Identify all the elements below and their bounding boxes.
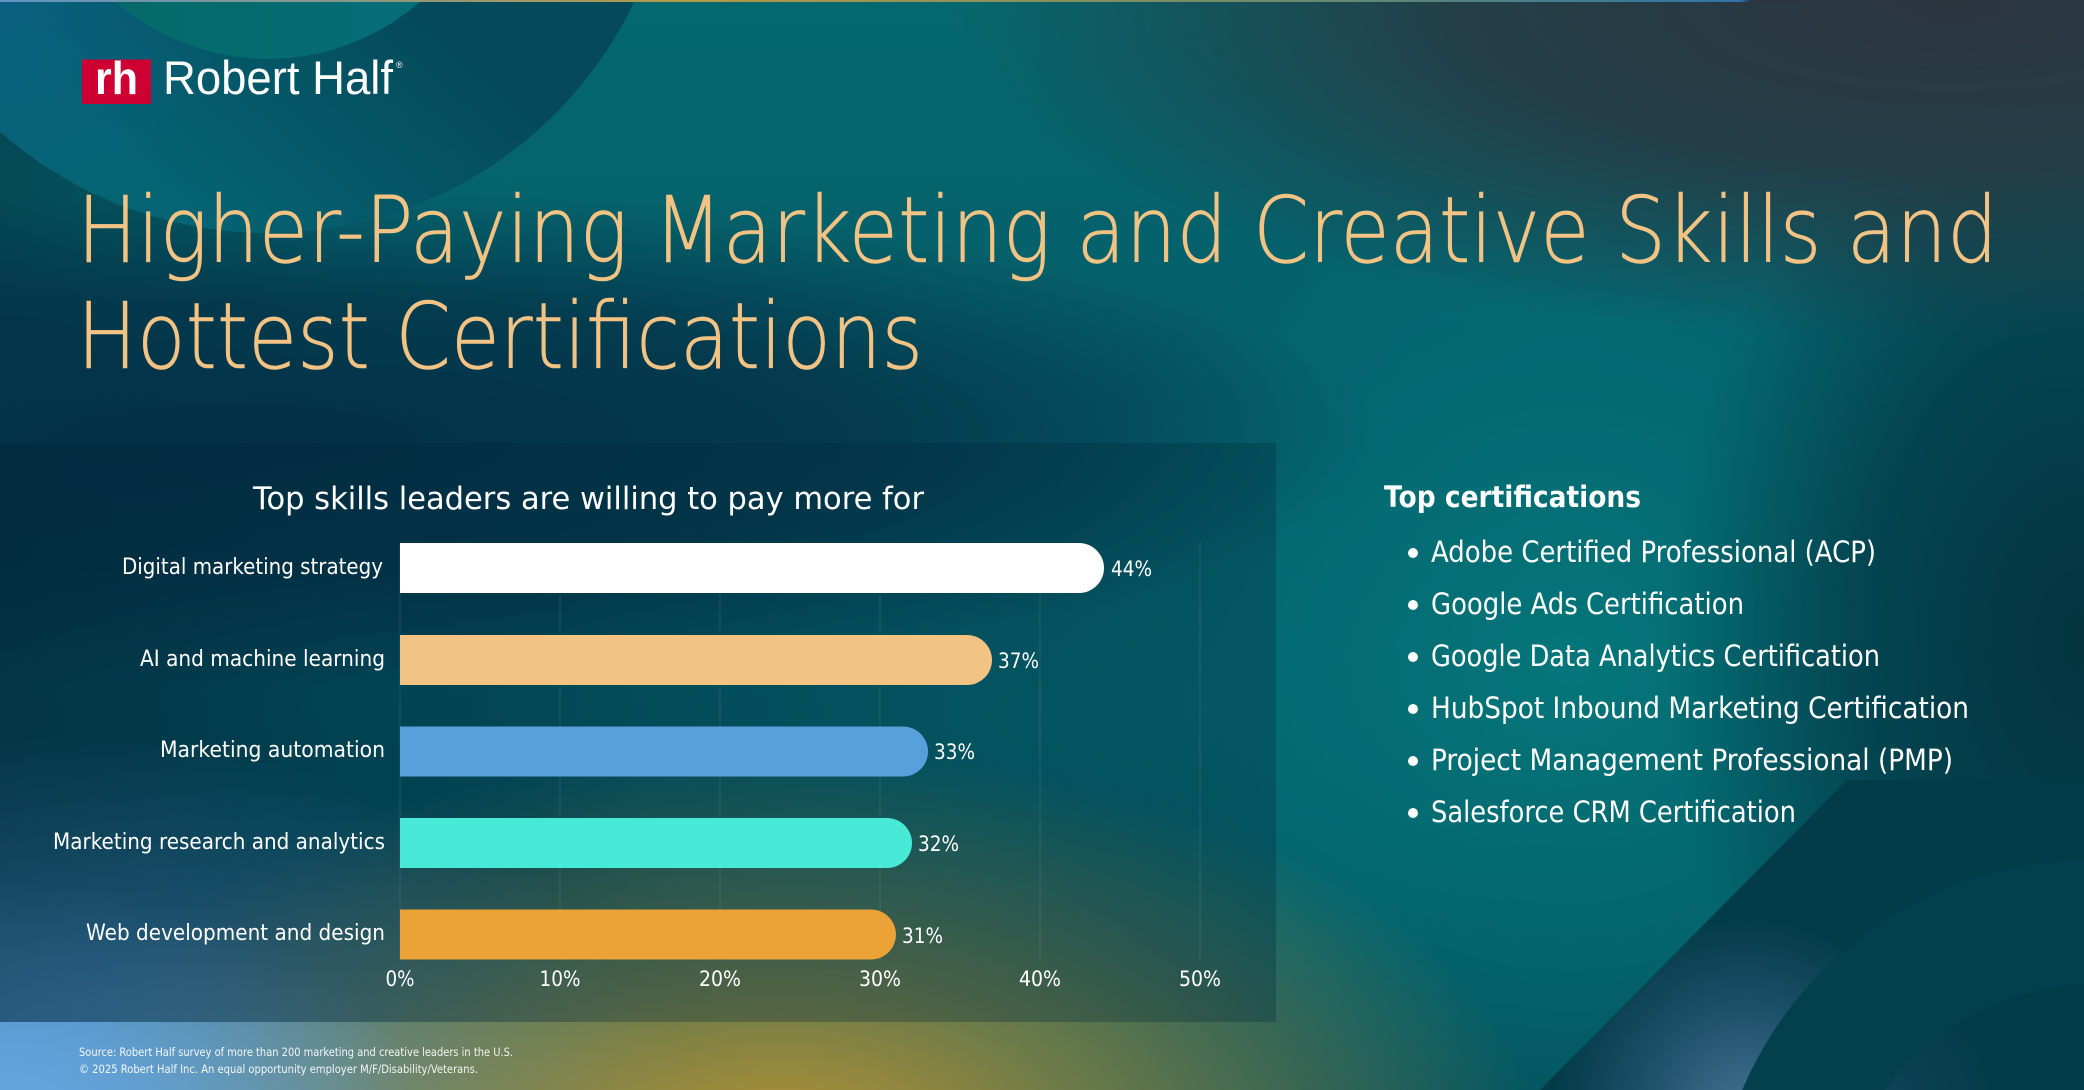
title: Hottest Certifications [77, 283, 923, 390]
icon: rh red box [82, 52, 151, 104]
x axis labels [386, 967, 1221, 991]
x axis labels: 40% [1019, 967, 1061, 991]
bar: Digital marketing strategy 44%: Digital marketing strategy [122, 555, 383, 580]
bar: Marketing research and analytics 32%: Marketing research and analytics [53, 830, 385, 855]
footer source text: © 2025 Robert Half Inc. An equal opportunity employer M/F/Disability/Veterans. [79, 1062, 478, 1076]
bar: Web development and design 31%: Web development and design [86, 921, 385, 946]
bar: AI and machine learning 37%: AI and machine learning [140, 647, 385, 672]
x axis labels: 20% [699, 967, 741, 991]
certifications list [1408, 535, 1969, 829]
bar: Web development and design 31%: 31% [902, 924, 943, 948]
bar: Digital marketing strategy 44%: 44% [1111, 557, 1152, 581]
bar: Digital marketing strategy 44% [122, 543, 1152, 593]
x axis labels: 30% [859, 967, 901, 991]
footer source text [79, 1045, 513, 1076]
x axis labels: 10% [540, 967, 580, 991]
certifications list: Google Data Analytics Certification [1431, 639, 1880, 673]
certifications list: Project Management Professional (PMP) [1431, 743, 1953, 777]
certifications heading: Top certifications [1384, 480, 1641, 514]
logo: Robert Half [82, 51, 403, 104]
decorative circles: top left [0, 0, 635, 233]
bar: Marketing research and analytics 32% [53, 818, 959, 868]
certifications list: Salesforce CRM Certification [1431, 795, 1796, 829]
chart heading: Top skills leaders are willing to pay more for [252, 481, 924, 517]
logo: Robert Half: ® [396, 60, 403, 70]
certifications list: Google Ads Certification [1431, 587, 1744, 621]
panel: top certifications [1384, 480, 1969, 829]
bar: AI and machine learning 37%: 37% [998, 649, 1039, 673]
x axis labels: 50% [1179, 967, 1221, 991]
wordmark: Robert Half [163, 51, 394, 104]
bar: Marketing automation 33% [160, 726, 975, 776]
bar: AI and machine learning 37% [140, 635, 1039, 685]
bar: Marketing research and analytics 32%: 32% [918, 832, 959, 856]
bar: Web development and design 31% [86, 910, 943, 960]
decorative shapes: bottom right [1540, 780, 2084, 1090]
panel: top skills chart [0, 443, 1276, 1022]
bar: Marketing automation 33%: Marketing automation [160, 738, 385, 763]
bar: Marketing automation 33%: 33% [934, 740, 975, 764]
title [77, 177, 1998, 390]
certifications list: Adobe Certified Professional (ACP) [1431, 535, 1876, 569]
footer source text: Source: Robert Half survey of more than 200 marketing and creative leaders in the U.S. [79, 1045, 513, 1059]
gridlines [400, 543, 1200, 960]
icon: rh red box: rh [95, 52, 138, 104]
x axis labels: 0% [386, 967, 414, 991]
top edge line [0, 0, 2084, 2]
certifications list: HubSpot Inbound Marketing Certification [1431, 691, 1969, 725]
